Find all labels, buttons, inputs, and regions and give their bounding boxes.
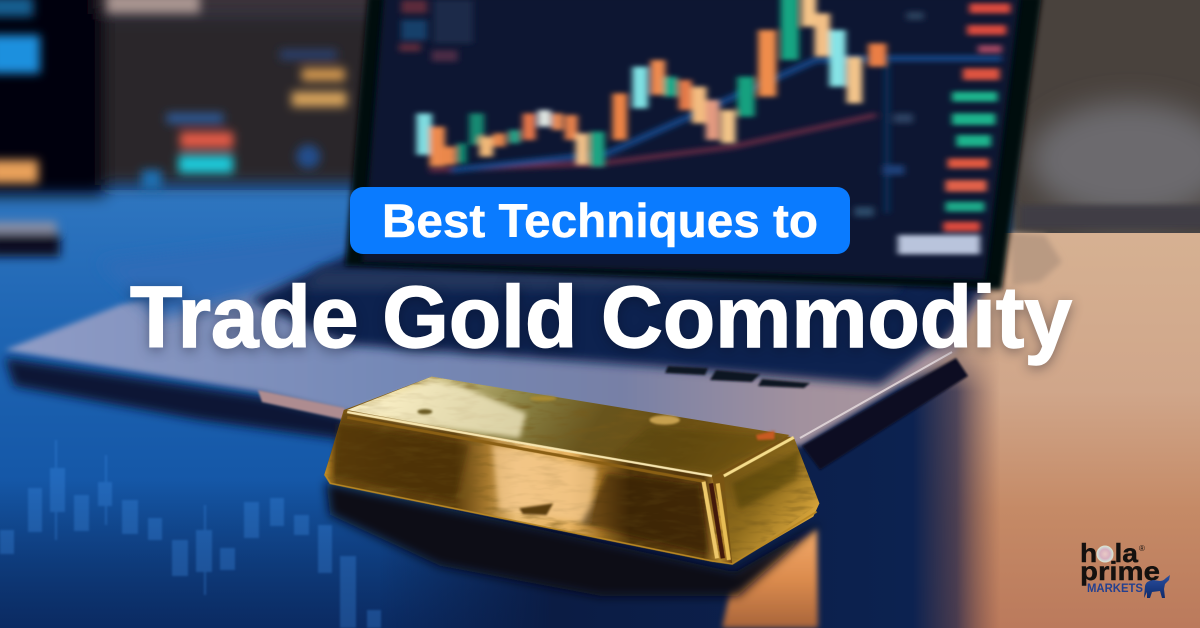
texture and highlights on bar [310, 370, 827, 570]
badge: Best Techniques to: Best Techniques to [382, 194, 818, 247]
navy desk shadow [380, 340, 1000, 628]
icon: bull [1144, 575, 1170, 598]
logo word markets: MARKETS [1087, 583, 1143, 595]
top face of bar [347, 377, 790, 477]
candlestick chart on screen [399, 0, 1011, 254]
blurred background monitor [0, 0, 347, 257]
faint candlesticks on desk [0, 440, 381, 628]
icon: registered mark: ® [1139, 544, 1145, 553]
gold bar [310, 370, 827, 570]
logo bubble [1097, 546, 1113, 562]
bar base shape [324, 377, 819, 564]
laptop base and keyboard [5, 232, 1000, 470]
side face of bar [724, 437, 819, 564]
right side wooden desk [900, 232, 1200, 628]
gold bar reflection [722, 529, 818, 628]
title: Trade Gold Commodity [130, 269, 1072, 366]
gold bar shadow [326, 482, 822, 596]
front face of bar [324, 413, 732, 563]
laptop screen [345, 0, 1042, 290]
badge: Best Techniques to [350, 187, 850, 254]
logo: hola prime markets [1080, 538, 1170, 598]
logo word hola: hola [1080, 538, 1139, 568]
logo word prime: prime [1080, 556, 1160, 586]
